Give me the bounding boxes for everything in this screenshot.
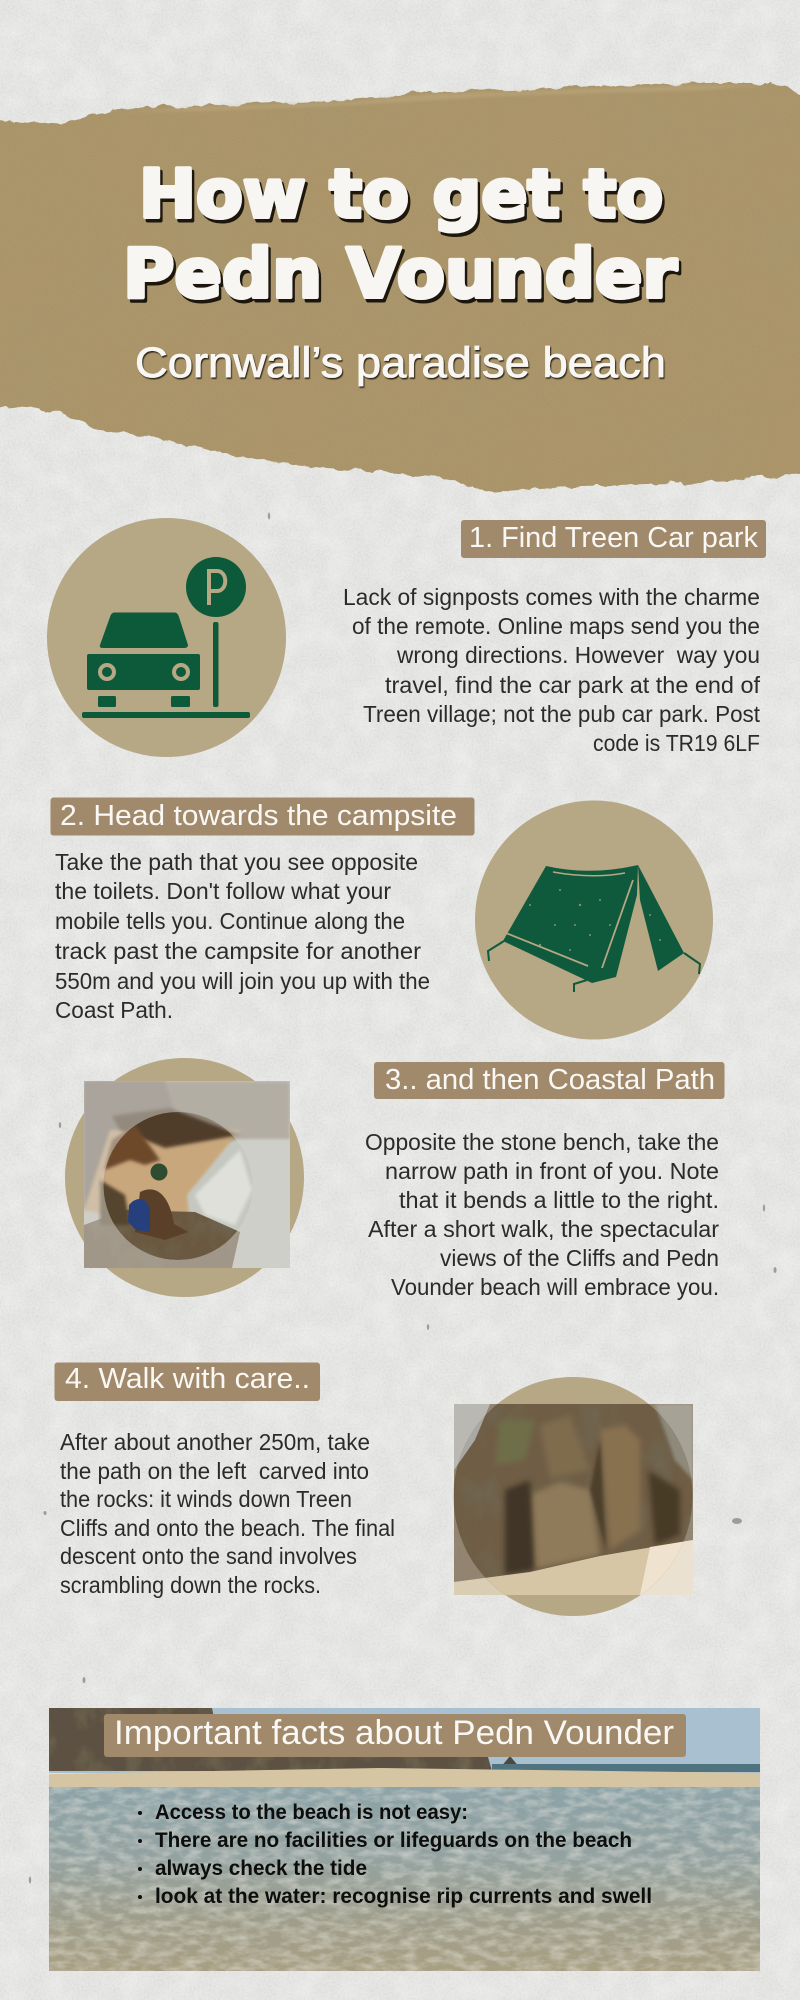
photo: cliffs and sand in a circle [454,1377,693,1616]
subtitle: Cornwall’s paradise beach [135,339,666,387]
facts list: Access to the beach is not easy: [155,1801,468,1824]
step 2 text: track past the campsite for another [55,938,421,964]
facts list: There are no facilities or lifeguards on the beach [155,1829,632,1852]
step 1 text: of the remote. Online maps send you the [352,613,760,639]
facts list: always check the tide [155,1857,367,1880]
step 2 text: 550m and you will join you up with the [55,968,430,994]
step 3 text: Opposite the stone bench, take the [365,1129,719,1155]
step 2 heading: 2. Head towards the campsite [60,800,457,832]
step 4 text: After about another 250m, take [60,1429,370,1455]
icon: tent [475,800,713,1040]
step 1 text: code is TR19 6LF [593,730,760,756]
cliffs [49,1708,492,1771]
sky [49,1708,760,1773]
title: How to get to [139,155,663,233]
step 4 text: scrambling down the rocks. [60,1572,321,1598]
step 3 text: views of the Cliffs and Pedn [440,1245,719,1271]
step 4 text: the path on the left carved into [60,1458,369,1484]
icon: car park [47,518,286,757]
step 3 text: that it bends a little to the right. [399,1187,719,1213]
step 3 text: narrow path in front of you. Note [385,1158,719,1184]
step 3 text: Vounder beach will embrace you. [391,1274,719,1300]
step 2 text [55,849,430,1023]
photo: hiker above the beach in a circle [65,1058,304,1297]
step 4 text: the rocks: it winds down Treen [60,1486,352,1512]
step 3 heading: 3.. and then Coastal Path [385,1064,715,1096]
step 1 text [343,584,761,756]
title: Pedn Vounder [123,235,677,314]
step 2 text: Coast Path. [55,997,173,1023]
step 3 text: After a short walk, the spectacular [368,1216,719,1242]
panel: important facts [49,1708,760,1971]
step 2 text: the toilets. Don't follow what your [55,878,391,904]
torn kraft paper header [0,83,800,492]
step 1 heading: 1. Find Treen Car park [469,522,758,554]
step 4 text [60,1429,395,1598]
facts list [138,1801,652,1908]
step 3 text [365,1129,719,1300]
step 4 text: descent onto the sand involves [60,1543,357,1569]
step 1 text: travel, find the car park at the end of [385,672,761,698]
facts list: look at the water: recognise rip currents and swell [155,1885,652,1908]
step 2 text: Take the path that you see opposite [55,849,418,875]
step 1 text: wrong directions. However way you [396,642,760,668]
step 4 heading: 4. Walk with care.. [65,1363,310,1395]
facts heading: Important facts about Pedn Vounder [114,1714,674,1752]
title [123,155,677,314]
step 1 text: Lack of signposts comes with the charme [343,584,760,610]
step 2 text: mobile tells you. Continue along the [55,908,405,934]
step 4 text: Cliffs and onto the beach. The final [60,1515,395,1541]
step 1 text: Treen village; not the pub car park. Post [363,701,761,727]
